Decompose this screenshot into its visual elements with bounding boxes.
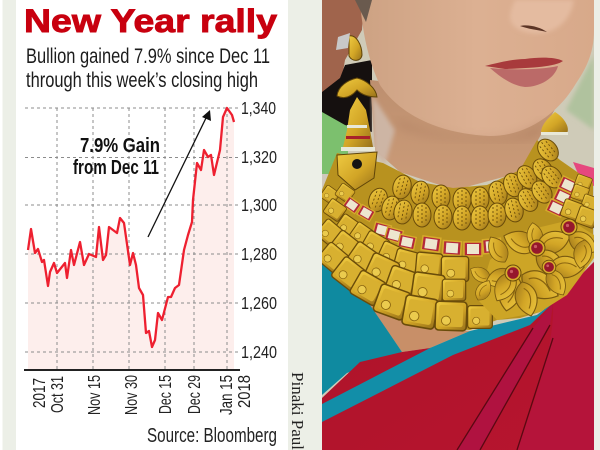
credit strip — [288, 0, 322, 450]
callout: 7.9% gain: 7.9% Gain — [80, 135, 160, 157]
gold collar base — [322, 140, 593, 330]
neck shadow — [526, 130, 543, 140]
x axis labels: Dec 29 — [184, 375, 204, 414]
y axis labels: 1,260 — [241, 293, 277, 313]
chart area fill — [28, 108, 234, 370]
y axis labels: 1,240 — [241, 342, 277, 362]
dark hair — [322, 60, 372, 132]
subtitle — [26, 45, 270, 92]
left earring — [336, 33, 377, 151]
x axis labels: Nov 30 — [121, 375, 141, 415]
callout: 7.9% gain: from Dec 11 — [73, 157, 159, 179]
fold lines — [457, 325, 553, 450]
green foliage right — [566, 55, 594, 130]
lips — [485, 58, 563, 87]
chest — [368, 303, 470, 352]
x axis labels: Dec 15 — [155, 375, 175, 414]
gold square links — [315, 174, 600, 331]
photo: woman wearing gold jewellery — [315, 0, 600, 450]
x axis labels: 2018 — [234, 375, 254, 408]
gold flower pendant — [467, 220, 600, 320]
photo background — [322, 24, 594, 398]
sari fold — [457, 303, 553, 450]
right margin strip — [594, 0, 600, 450]
y axis labels: 1,300 — [241, 195, 277, 215]
hair strand — [355, 0, 372, 22]
face — [360, 0, 594, 136]
x axis labels: Oct 31 — [47, 376, 67, 413]
nose — [510, 0, 574, 33]
x axis labels: Jan 15 — [216, 375, 236, 415]
subtitle: through this week’s closing high — [26, 69, 258, 92]
callout: 7.9% gain — [73, 135, 160, 179]
line chart — [24, 98, 277, 415]
photo credit: Pinaki Paul — [288, 372, 307, 450]
sari red base — [322, 262, 594, 450]
rubies — [505, 219, 577, 281]
green foliage left — [322, 112, 348, 174]
x axis labels: Nov 15 — [84, 375, 104, 415]
pendant beside earring — [337, 152, 377, 190]
teal sari border — [322, 303, 553, 422]
x axis line — [24, 369, 240, 371]
y axis labels — [241, 98, 277, 362]
left margin strip — [2, 0, 16, 450]
price line — [28, 108, 234, 347]
left shoulder kundan row — [319, 183, 375, 222]
teal blouse left — [322, 252, 402, 395]
x axis labels: 2017 — [29, 378, 49, 408]
y axis labels: 1,340 — [241, 98, 276, 118]
panel: gold price chart — [24, 3, 277, 447]
source: Source: Bloomberg — [147, 424, 277, 447]
y axis labels: 1,320 — [241, 147, 277, 167]
kundan stones — [373, 176, 578, 256]
ear — [322, 0, 364, 95]
arrow — [148, 110, 211, 237]
y axis labels: 1,280 — [241, 244, 277, 264]
crimson sari right panel — [517, 262, 594, 450]
title: New Year rally — [24, 3, 277, 39]
x axis labels — [29, 375, 254, 415]
necklace upper bead row — [392, 138, 559, 209]
pink fabric right — [573, 162, 594, 186]
neck — [370, 80, 560, 190]
grey patch left — [322, 174, 342, 194]
right earring — [541, 112, 568, 135]
necklace lower bead row — [365, 162, 567, 230]
subtitle: Bullion gained 7.9% since Dec 11 — [26, 45, 270, 68]
pale neck edge — [372, 95, 395, 165]
